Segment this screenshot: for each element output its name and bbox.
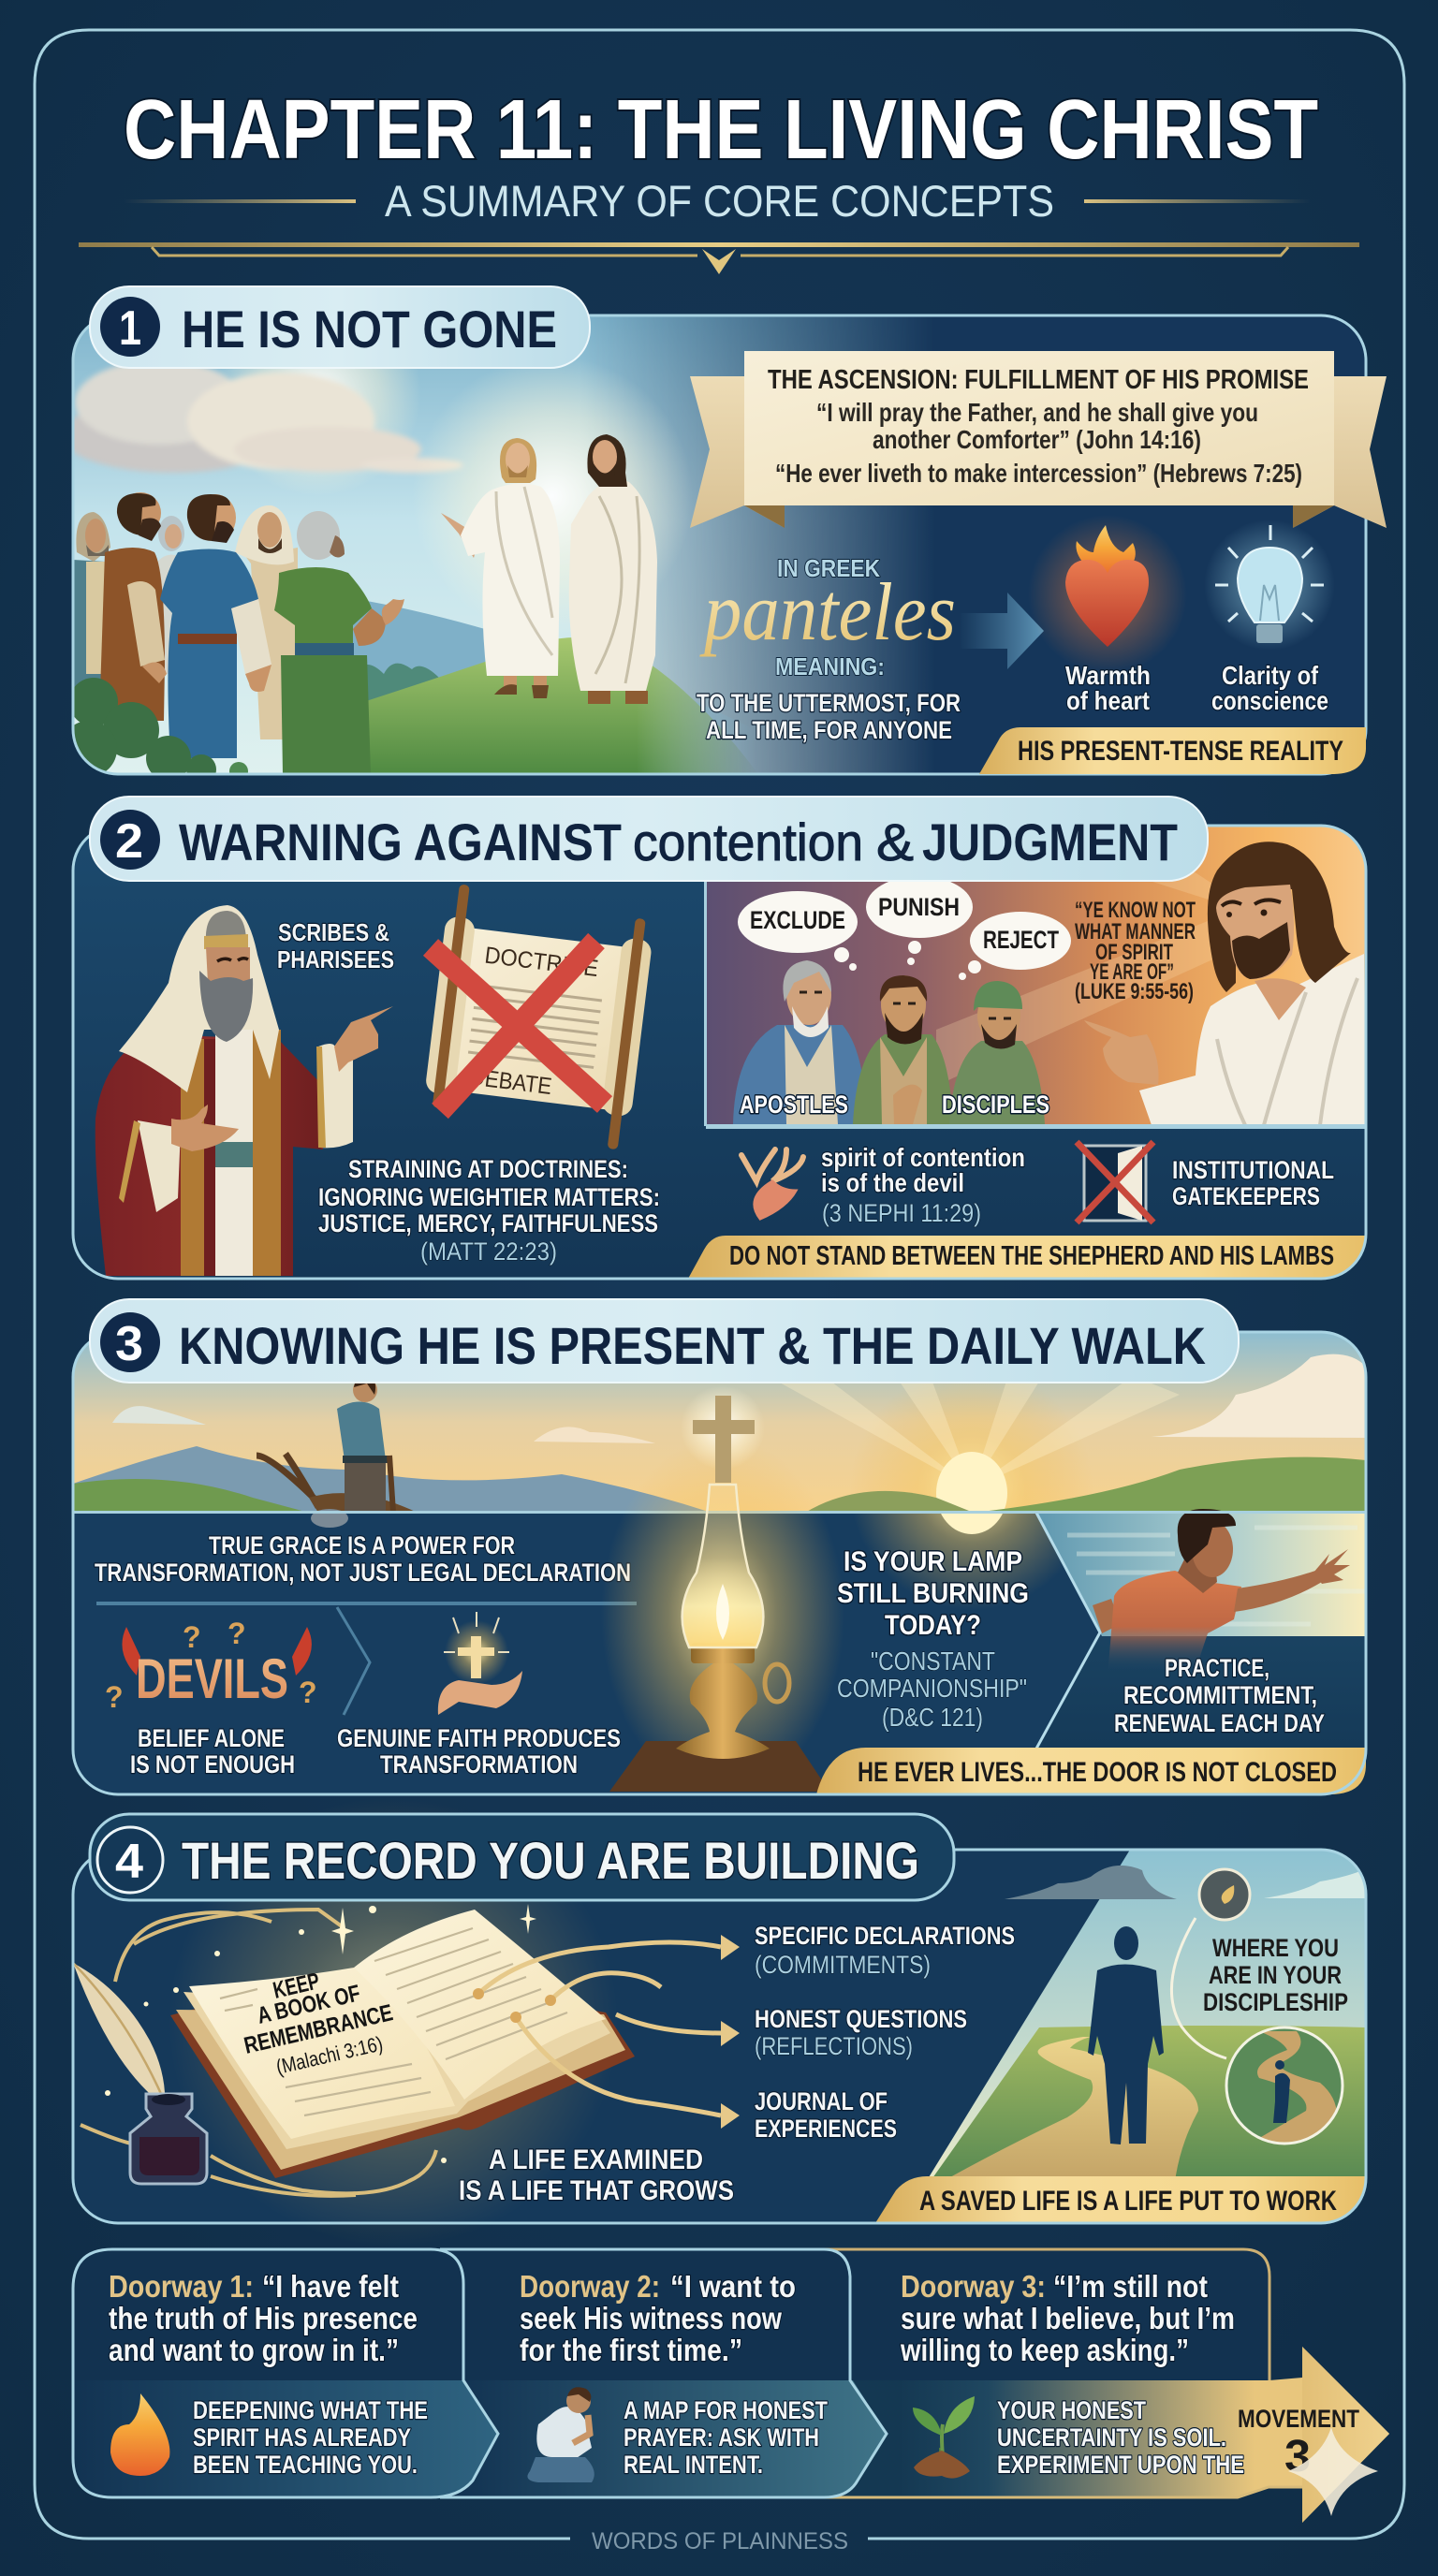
ribbon banner bbox=[690, 351, 1387, 528]
text: practice and renewal: PRACTICE, bbox=[1165, 1654, 1269, 1682]
tag: shepherd and lambs bbox=[688, 1236, 1366, 1279]
doorway 3 text: “I’m still not bbox=[1053, 2269, 1208, 2304]
text: practice and renewal: RENEWAL EACH DAY bbox=[1114, 1709, 1325, 1737]
labels: apostles and disciples: APOSTLES bbox=[740, 1090, 848, 1119]
heading pill 3 bbox=[90, 1299, 1239, 1383]
tag: present-tense reality bbox=[979, 727, 1366, 774]
doorway 1 text: and want to grow in it.” bbox=[109, 2333, 399, 2367]
text: straining at doctrines: (MATT 22:23) bbox=[420, 1237, 557, 1266]
doorway 2 note: PRAYER: ASK WITH bbox=[624, 2423, 819, 2452]
labels: apostles and disciples bbox=[739, 1093, 1050, 1115]
text: spirit of contention bbox=[821, 1143, 1025, 1227]
quote: luke 9: OF SPIRIT bbox=[1095, 940, 1173, 965]
subtitle: A SUMMARY OF CORE CONCEPTS bbox=[385, 176, 1054, 226]
bushes bbox=[75, 678, 248, 773]
text: a life examined: A LIFE EXAMINED bbox=[489, 2144, 703, 2175]
doorway 1 note: DEEPENING WHAT THE bbox=[193, 2396, 428, 2424]
landscape with path bbox=[901, 1850, 1367, 2223]
heading pill 2: contention bbox=[633, 812, 863, 871]
label: movement 3 bbox=[1238, 2405, 1359, 2481]
text: institutional gatekeepers: INSTITUTIONAL bbox=[1172, 1156, 1334, 1184]
heading pill 2: 2 bbox=[115, 814, 143, 869]
thought bubbles: PUNISH bbox=[878, 893, 960, 921]
inset circle: you on the path bbox=[1226, 2027, 1343, 2144]
panel 4: the record you are building bbox=[73, 1797, 1367, 2247]
heading pill 1: 1 bbox=[119, 301, 141, 356]
figure: pharisee bbox=[95, 905, 393, 1276]
list of record entries bbox=[755, 1922, 1015, 2143]
panel 2: warning against contention bbox=[73, 826, 1366, 1279]
doorway 3 note: YOUR HONEST bbox=[997, 2396, 1146, 2424]
icon: devils with question marks bbox=[105, 1617, 317, 1714]
labels: belief and faith: TRANSFORMATION bbox=[380, 1750, 578, 1778]
greek word panteles: panteles bbox=[698, 567, 956, 658]
icon: devils with question marks: ? bbox=[105, 1680, 124, 1714]
panel 1: he is not gone bbox=[61, 290, 1366, 784]
text: straining at doctrines: JUSTICE, MERCY, FAITHFULNESS bbox=[318, 1209, 658, 1237]
text: straining at doctrines bbox=[318, 1155, 660, 1266]
label: movement 3: MOVEMENT bbox=[1238, 2405, 1359, 2433]
tag: saved life: A SAVED LIFE IS A LIFE PUT TO WORK bbox=[919, 2186, 1337, 2217]
ribbon banner: “He ever liveth to make intercession” (Hebrews 7:25) bbox=[775, 459, 1302, 488]
footer: WORDS OF PLAINNESS bbox=[592, 2528, 848, 2554]
doorway 2 note: A MAP FOR HONEST bbox=[624, 2396, 828, 2424]
water scene with reaching figure bbox=[1036, 1509, 1366, 1749]
heading pill 2 bbox=[90, 797, 1208, 881]
icon: flame bbox=[110, 2393, 169, 2476]
greek word panteles: ALL TIME, FOR ANYONE bbox=[706, 716, 952, 744]
labels: apostles and disciples: DISCIPLES bbox=[942, 1090, 1049, 1119]
labels: belief and faith: IS NOT ENOUGH bbox=[130, 1750, 295, 1778]
icon: light bulb bbox=[1204, 520, 1335, 651]
door 3 with movement arrow bbox=[824, 2249, 1389, 2523]
text: is your lamp still burning: COMPANIONSHIP" bbox=[837, 1674, 1027, 1703]
heading pill 4: THE RECORD YOU ARE BUILDING bbox=[182, 1831, 919, 1890]
figure: companion in white bbox=[569, 434, 657, 704]
doorway 3 note bbox=[997, 2396, 1244, 2479]
text: institutional gatekeepers: GATEKEEPERS bbox=[1172, 1182, 1320, 1210]
large figure of Christ bbox=[1084, 842, 1366, 1125]
doorway 1 text: “I have felt bbox=[262, 2269, 399, 2304]
mountains and hill bbox=[353, 601, 749, 773]
sunset scene bbox=[706, 826, 1366, 1124]
doorway 2 text: for the first time.” bbox=[520, 2333, 742, 2367]
illustration: book of remembrance: KEEP bbox=[271, 1968, 322, 2004]
arrows from book to notes bbox=[473, 1935, 740, 2129]
doorway 2 note bbox=[624, 2396, 828, 2479]
icon: crossed-out doctrine scroll bbox=[420, 883, 656, 1150]
doorway 2 text: Doorway 2: bbox=[520, 2269, 660, 2304]
list of record entries: JOURNAL OF bbox=[755, 2087, 888, 2115]
icon: spirit of contention bbox=[741, 1149, 803, 1219]
labels: warmth and clarity: conscience bbox=[1211, 686, 1328, 715]
text: is your lamp still burning bbox=[837, 1546, 1029, 1732]
text: is your lamp still burning: TODAY? bbox=[885, 1610, 981, 1641]
label: movement 3: 3 bbox=[1284, 2432, 1311, 2481]
labels: warmth and clarity bbox=[1065, 661, 1328, 715]
text: institutional gatekeepers bbox=[1172, 1156, 1334, 1210]
text: is your lamp still burning: (D&C 121) bbox=[882, 1703, 983, 1732]
icon: crossed-out door bbox=[1077, 1142, 1153, 1222]
heading pill 1 bbox=[90, 286, 590, 368]
greek word panteles bbox=[697, 554, 961, 744]
illustration: lamp with cross bbox=[601, 1385, 844, 1793]
text: a life examined: IS A LIFE THAT GROWS bbox=[459, 2175, 734, 2206]
heading pill 1: HE IS NOT GONE bbox=[182, 300, 557, 359]
text: a life examined bbox=[459, 2144, 734, 2206]
labels: belief and faith: BELIEF ALONE bbox=[138, 1724, 285, 1752]
door 2 card bbox=[440, 2249, 887, 2497]
quote: luke 9: YE ARE OF” bbox=[1090, 959, 1174, 985]
icon: sparkle bbox=[1288, 2427, 1378, 2516]
three disciples bbox=[733, 960, 1045, 1124]
labels: warmth and clarity: of heart bbox=[1066, 686, 1150, 715]
illustration: book of remembrance: REMEMBRANCE bbox=[242, 1999, 395, 2059]
doorway 1 text: the truth of His presence bbox=[109, 2301, 418, 2335]
illustration: book of remembrance bbox=[81, 1797, 635, 2247]
icon: devils with question marks: DEVILS bbox=[136, 1647, 288, 1710]
icon: quill and ink bbox=[73, 1963, 207, 2184]
text: where you are: DISCIPLESHIP bbox=[1203, 1988, 1348, 2016]
doorways section bbox=[73, 2249, 1389, 2523]
text: practice and renewal bbox=[1114, 1654, 1325, 1737]
labels: belief and faith: GENUINE FAITH PRODUCES bbox=[337, 1724, 621, 1752]
greek word panteles: IN GREEK bbox=[777, 554, 880, 582]
thought bubbles: REJECT bbox=[983, 926, 1059, 954]
doorway 3 text bbox=[900, 2269, 1235, 2367]
icon: devils with question marks: ? bbox=[299, 1676, 317, 1709]
text: true grace: TRANSFORMATION, NOT JUST LEGAL DECLARATION bbox=[95, 1559, 631, 1587]
door 1 card bbox=[73, 2249, 498, 2497]
quote: luke 9: (LUKE 9:55-56) bbox=[1075, 979, 1194, 1004]
doorway 2 note: REAL INTENT. bbox=[624, 2451, 763, 2479]
list of record entries: SPECIFIC DECLARATIONS bbox=[755, 1922, 1015, 1950]
text: where you are: ARE IN YOUR bbox=[1209, 1961, 1342, 1989]
landscape scene bbox=[73, 1332, 1366, 1610]
ribbon banner: another Comforter” (John 14:16) bbox=[873, 425, 1201, 454]
doorway 2 text bbox=[520, 2269, 796, 2367]
figure: man at the plow bbox=[257, 1376, 418, 1528]
doorway 3 note: EXPERIMENT UPON THE bbox=[997, 2451, 1244, 2479]
doorway 3 text: sure what I believe, but I’m bbox=[901, 2301, 1235, 2335]
heading pill 2: WARNING AGAINST bbox=[179, 812, 622, 871]
doorway 3 text: willing to keep asking.” bbox=[900, 2333, 1189, 2367]
doorway 3 text: Doorway 3: bbox=[901, 2269, 1046, 2304]
doorway 1 note bbox=[193, 2396, 428, 2479]
icon: kneeling man praying bbox=[527, 2387, 594, 2482]
tag: saved life bbox=[875, 2176, 1366, 2223]
pointer from pin to inset bbox=[1171, 1918, 1226, 2058]
icon: crossed-out doctrine scroll: DEBATE bbox=[468, 1064, 553, 1100]
text: practice and renewal: RECOMMITTMENT, bbox=[1123, 1681, 1317, 1709]
icon: flaming heart bbox=[1028, 515, 1187, 674]
tag: door is not closed bbox=[816, 1748, 1366, 1794]
label: scribes and pharisees: PHARISEES bbox=[277, 945, 394, 973]
quote: luke 9: “YE KNOW NOT bbox=[1075, 898, 1196, 923]
thought bubbles bbox=[738, 876, 1071, 980]
labels: warmth and clarity: Clarity of bbox=[1222, 661, 1319, 690]
doorway 2 text: “I want to bbox=[670, 2269, 796, 2304]
doorway 2 text: seek His witness now bbox=[520, 2301, 782, 2335]
text: is your lamp still burning: STILL BURNING bbox=[837, 1578, 1029, 1609]
doorway 1 note: BEEN TEACHING YOU. bbox=[193, 2451, 418, 2479]
icon: hand holding cross bbox=[438, 1612, 522, 1715]
illustration: book of remembrance: (Malachi 3:16) bbox=[274, 2031, 385, 2079]
greek word panteles: TO THE UTTERMOST, FOR bbox=[697, 689, 961, 717]
icon: sprout in soil bbox=[913, 2396, 975, 2479]
text: true grace bbox=[95, 1531, 631, 1587]
heading pill 2: & bbox=[876, 812, 914, 871]
heading pill 3: 3 bbox=[115, 1317, 143, 1371]
label: scribes and pharisees: SCRIBES & bbox=[278, 918, 389, 946]
heading pill 2: JUDGMENT bbox=[922, 812, 1178, 871]
subtitle bbox=[124, 176, 1311, 226]
list of record entries: EXPERIENCES bbox=[755, 2115, 897, 2143]
text: where you are bbox=[1203, 1934, 1348, 2016]
thought bubbles: EXCLUDE bbox=[750, 906, 845, 934]
label: scribes and pharisees bbox=[277, 923, 395, 970]
list of record entries: HONEST QUESTIONS bbox=[755, 2005, 967, 2033]
crowd of disciples bbox=[61, 492, 404, 784]
illustration: book of remembrance: A BOOK OF bbox=[255, 1980, 362, 2029]
gold title divider bbox=[79, 242, 1359, 274]
quote: luke 9: WHAT MANNER bbox=[1075, 919, 1196, 944]
ribbon banner: THE ASCENSION: FULFILLMENT OF HIS PROMISE bbox=[768, 365, 1309, 395]
list of record entries: (COMMITMENTS) bbox=[755, 1951, 931, 1979]
heading pill 3: KNOWING HE IS PRESENT & THE DAILY WALK bbox=[179, 1316, 1206, 1375]
figure: silhouette walker bbox=[1088, 1926, 1164, 2144]
quote: luke 9 bbox=[1075, 898, 1196, 1004]
panel 3: knowing he is present bbox=[73, 1332, 1366, 1794]
heading pill 4: 4 bbox=[115, 1835, 143, 1889]
ribbon banner: “I will pray the Father, and he shall give you bbox=[816, 398, 1258, 427]
doorway 3 note: UNCERTAINTY IS SOIL. bbox=[997, 2423, 1226, 2452]
labels: warmth and clarity: Warmth bbox=[1065, 661, 1151, 690]
text: straining at doctrines: IGNORING WEIGHTIER MATTERS: bbox=[318, 1183, 660, 1211]
doorway 1 text bbox=[109, 2269, 418, 2367]
doorway 1 note: SPIRIT HAS ALREADY bbox=[193, 2423, 411, 2452]
icon: devils with question marks: ? bbox=[227, 1617, 246, 1650]
list of record entries: (REFLECTIONS) bbox=[755, 2032, 913, 2060]
figure: risen Christ bbox=[441, 438, 560, 698]
arrow to icons bbox=[959, 593, 1044, 669]
tag: present-tense reality: HIS PRESENT-TENSE REALITY bbox=[1018, 736, 1343, 767]
heading pill 4 bbox=[90, 1814, 954, 1900]
greek word panteles: MEANING: bbox=[775, 652, 885, 681]
icon: crossed-out doctrine scroll: DOCTRINE bbox=[483, 942, 600, 982]
sky scene bbox=[61, 290, 944, 774]
text: is your lamp still burning: IS YOUR LAMP bbox=[844, 1546, 1022, 1577]
doorway 1 text: Doorway 1: bbox=[109, 2269, 254, 2304]
text: true grace: TRUE GRACE IS A POWER FOR bbox=[209, 1531, 515, 1559]
labels: belief and faith bbox=[130, 1724, 621, 1778]
text: straining at doctrines: STRAINING AT DOCTRINES: bbox=[348, 1155, 628, 1183]
text: where you are: WHERE YOU bbox=[1212, 1934, 1339, 1962]
icon: devils with question marks: ? bbox=[183, 1620, 201, 1654]
text: is your lamp still burning: "CONSTANT bbox=[871, 1647, 995, 1676]
text: spirit of contention: (3 NEPHI 11:29) bbox=[822, 1199, 981, 1227]
text: spirit of contention: spirit of contention bbox=[821, 1143, 1025, 1172]
text: spirit of contention: is of the devil bbox=[821, 1168, 964, 1197]
icon: location pin bbox=[1199, 1869, 1250, 1920]
